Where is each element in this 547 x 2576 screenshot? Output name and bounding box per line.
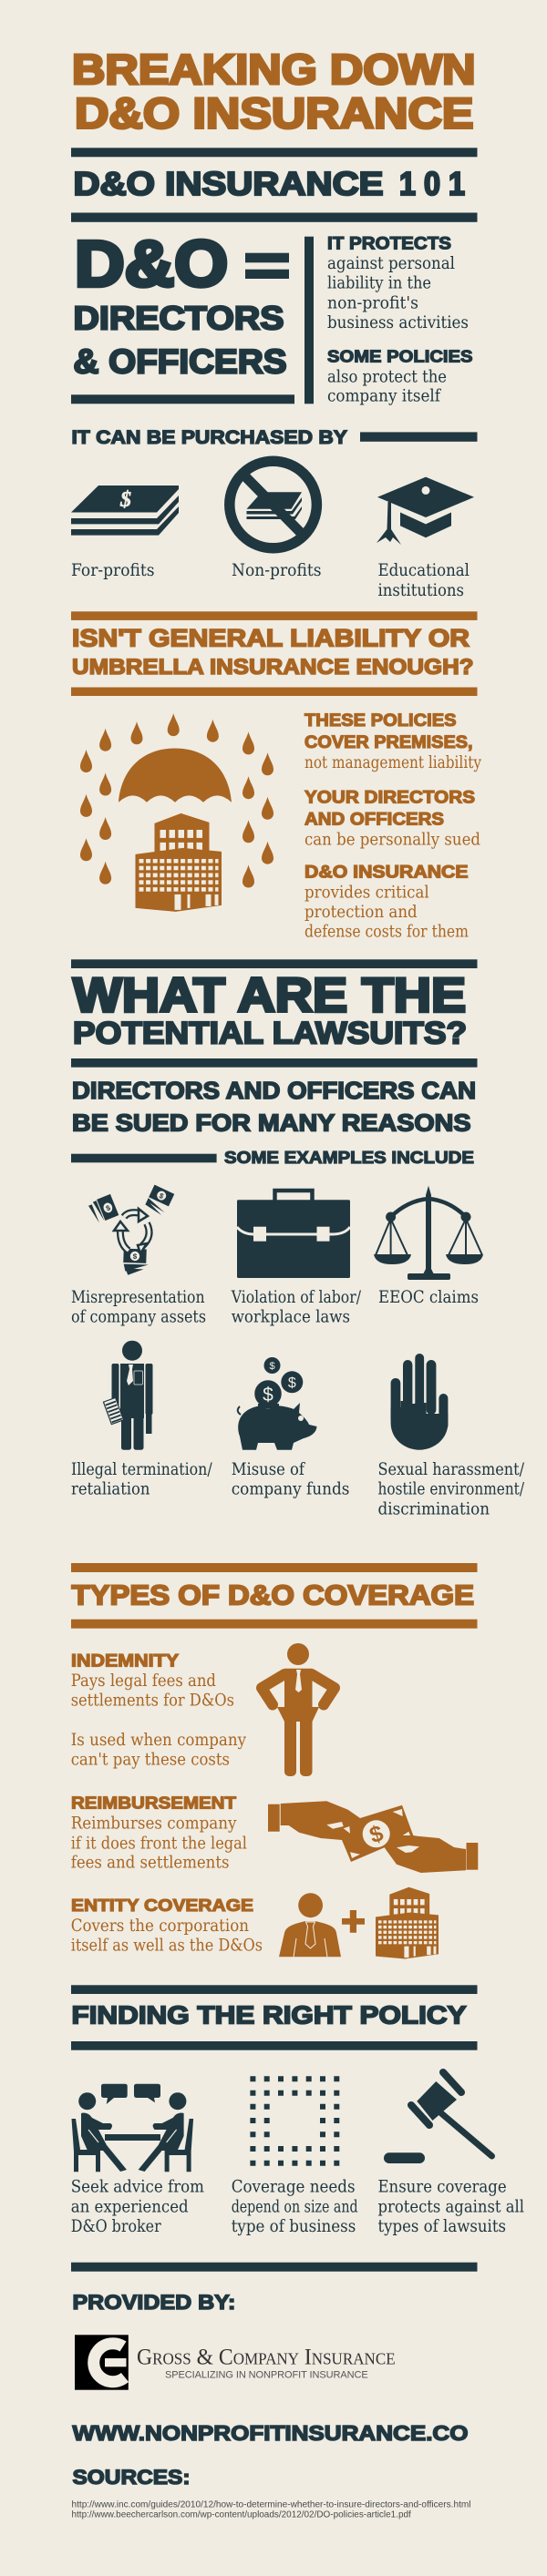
icon: stack of money <box>71 486 179 536</box>
icon: raised hand <box>391 1354 448 1450</box>
text: D&O insurance provides: provides critical <box>304 883 429 902</box>
heading: types of D&O coverage: TYPES OF D&O COVERAGE <box>71 1580 474 1610</box>
text: entity coverage <box>71 1896 263 1956</box>
icon: graduation cap <box>377 477 474 545</box>
icon: piggy bank with coins <box>238 1357 317 1450</box>
subheading: sued for many reasons <box>72 1078 476 1137</box>
heading: potential lawsuits <box>73 969 467 1051</box>
icon: businessman with clipboard <box>103 1341 153 1450</box>
text: indemnity: can't pay these costs <box>71 1751 230 1770</box>
label: illegal termination: Illegal termination/ <box>71 1460 212 1479</box>
text: these policies: not management liability <box>304 753 481 772</box>
text: indemnity: Is used when company <box>71 1731 246 1750</box>
icon: money cycle: $ <box>158 1191 165 1201</box>
icon: umbrella over building in rain <box>80 713 274 912</box>
icon: dotted nested squares <box>250 2076 339 2166</box>
text: indemnity: Pays legal fees and <box>71 1671 216 1691</box>
title: D&O INSURANCE <box>75 88 474 137</box>
label: seek advice <box>71 2178 204 2236</box>
text: it protects: liability in the <box>327 274 431 293</box>
label: misuse of funds: Misuse of <box>232 1460 305 1479</box>
text: some policies <box>327 346 472 406</box>
label: educational institutions <box>377 561 470 600</box>
directors and officers <box>73 300 286 381</box>
heading: provided by: PROVIDED BY: <box>73 2291 235 2314</box>
text: indemnity <box>71 1652 246 1770</box>
icon: hands exchanging money <box>268 1801 478 1873</box>
heading: D&O insurance 101: D&O INSURANCE <box>73 165 383 202</box>
heading: potential lawsuits: WHAT ARE THE <box>73 969 466 1023</box>
icon: person plus building <box>279 1887 439 1959</box>
label: ensure coverage: types of lawsuits <box>377 2217 506 2236</box>
label: for-profits: For-profits <box>71 561 155 580</box>
text: these policies: COVER PREMISES, <box>304 733 472 752</box>
heading: potential lawsuits: POTENTIAL LAWSUITS? <box>73 1017 467 1051</box>
icon: stack of money: $ <box>119 488 131 512</box>
text: entity coverage: ENTITY COVERAGE <box>71 1896 253 1915</box>
text: some policies: company itself <box>327 386 441 406</box>
title: BREAKING DOWN <box>72 46 476 93</box>
heading: finding the right policy: FINDING THE RIGHT POLICY <box>71 2000 467 2029</box>
subheading: some examples include: SOME EXAMPLES INCLUDE <box>224 1149 474 1167</box>
label: sexual harassment: Sexual harassment/ <box>377 1460 525 1479</box>
text: your directors: can be personally sued <box>304 830 480 849</box>
label: ensure coverage: protects against all <box>377 2197 524 2216</box>
text: these policies <box>304 711 481 772</box>
big D&O equals: D&O <box>75 229 228 301</box>
icon: piggy bank with coins: $ <box>263 1385 274 1406</box>
heading: general liability <box>72 625 474 680</box>
label: misuse of funds <box>232 1460 350 1499</box>
text: some policies: SOME POLICIES <box>327 346 472 365</box>
label: seek advice: D&O broker <box>71 2217 161 2236</box>
text: your directors <box>304 788 480 849</box>
label: coverage needs <box>232 2178 358 2236</box>
label: violation of labor: workplace laws <box>232 1308 350 1327</box>
icon: hands exchanging money: $ <box>366 1820 387 1848</box>
heading: D&O insurance 101: 1 0 1 <box>399 165 465 202</box>
text: indemnity: settlements for D&Os <box>71 1692 234 1711</box>
label: misuse of funds: company funds <box>232 1480 350 1499</box>
text: D&O insurance provides <box>304 864 469 941</box>
label: ensure coverage: Ensure coverage <box>377 2178 507 2197</box>
source links: http://www.inc.com/guides/2010/12/how-to-determine-whether-to-insure-directors-and-officers.html <box>71 2500 470 2510</box>
text: it protects: business activities <box>327 313 469 332</box>
logo: Gross & Company: SPECIALIZING IN NONPROFIT INSURANCE <box>165 2370 368 2381</box>
text: your directors: AND OFFICERS <box>304 810 444 829</box>
label: sexual harassment <box>377 1460 525 1518</box>
label: educational institutions: institutions <box>377 581 464 600</box>
label: violation of labor: Violation of labor/ <box>231 1288 362 1307</box>
label: illegal termination: retaliation <box>71 1480 150 1499</box>
heading: it can be purchased by: IT CAN BE PURCHASED BY <box>71 427 347 448</box>
text: entity coverage: itself as well as the D&Os <box>71 1937 263 1956</box>
website address: WWW.NONPROFITINSURANCE.CO <box>73 2421 469 2445</box>
text: it protects: against personal <box>327 254 455 273</box>
text: it protects: IT PROTECTS <box>327 235 451 254</box>
label: coverage needs: depend on size and <box>232 2197 358 2216</box>
directors and officers: DIRECTORS <box>73 300 284 337</box>
icon: no money <box>230 461 316 548</box>
label: seek advice: Seek advice from <box>71 2178 204 2197</box>
text: it protects: non-profit's <box>327 293 418 312</box>
text: it protects <box>327 235 469 332</box>
logo: Gross & Company: Gross & Company Insurance <box>137 2346 396 2370</box>
label: misrepresentation: Misrepresentation <box>71 1288 205 1307</box>
label: violation of labor <box>231 1288 362 1327</box>
label: misrepresentation: of company assets <box>71 1308 206 1327</box>
source links <box>71 2500 470 2520</box>
text: these policies: THESE POLICIES <box>304 711 457 731</box>
icon: money cycle: $ <box>105 1203 112 1212</box>
heading: general liability: UMBRELLA INSURANCE ENOUGH? <box>72 655 474 680</box>
label: illegal termination <box>71 1460 212 1499</box>
label: coverage needs: type of business <box>232 2217 356 2236</box>
label: coverage needs: Coverage needs <box>232 2178 356 2197</box>
icon: piggy bank with coins: $ <box>288 1375 296 1391</box>
text: reimbursement: Reimburses company <box>71 1814 237 1834</box>
text: reimbursement: REIMBURSEMENT <box>71 1794 237 1813</box>
icon: meeting at table <box>71 2084 193 2172</box>
icon: gavel <box>384 2072 492 2163</box>
text: reimbursement: if it does front the legal <box>71 1834 247 1853</box>
text: entity coverage: Covers the corporation <box>71 1917 249 1936</box>
icon: money cycle: $ <box>133 1252 138 1261</box>
icon: briefcase <box>237 1191 350 1278</box>
text: reimbursement: fees and settlements <box>71 1854 230 1873</box>
label: EEOC claims: EEOC claims <box>378 1288 479 1307</box>
label: sexual harassment: discrimination <box>377 1499 490 1518</box>
label: non-profits: Non-profits <box>232 561 321 580</box>
directors and officers: & OFFICERS <box>73 343 286 381</box>
subheading: sued for many reasons: DIRECTORS AND OFFICERS CAN <box>72 1078 476 1104</box>
label: seek advice: an experienced <box>71 2197 189 2216</box>
label: misrepresentation <box>71 1288 206 1327</box>
text: your directors: YOUR DIRECTORS <box>304 788 475 807</box>
text: D&O insurance provides: protection and <box>304 903 418 922</box>
label: educational institutions: Educational <box>377 561 470 580</box>
text: D&O insurance provides: D&O INSURANCE <box>304 864 469 882</box>
icon: money cycle <box>88 1185 174 1276</box>
icon: man with hands on hips <box>262 1643 335 1776</box>
heading: sources: SOURCES: <box>73 2466 190 2489</box>
label: ensure coverage <box>377 2178 524 2236</box>
text: indemnity: INDEMNITY <box>71 1652 179 1671</box>
text: D&O insurance provides: defense costs for them <box>304 922 469 941</box>
icon: piggy bank with coins: $ <box>269 1361 275 1372</box>
logo: Gross & Company <box>75 2335 396 2390</box>
subheading: sued for many reasons: BE SUED FOR MANY REASONS <box>72 1111 470 1137</box>
panel: D&O definition <box>71 229 472 406</box>
title <box>72 46 476 137</box>
icon: scales of justice <box>374 1186 483 1280</box>
text: reimbursement <box>71 1794 247 1873</box>
heading: general liability: ISN'T GENERAL LIABILITY OR <box>72 625 470 652</box>
source links: http://www.beechercarlson.com/wp-content/uploads/2012/02/DO-policies-article1.pdf <box>71 2510 411 2520</box>
big D&O equals <box>75 229 289 301</box>
text: some policies: also protect the <box>327 368 447 386</box>
